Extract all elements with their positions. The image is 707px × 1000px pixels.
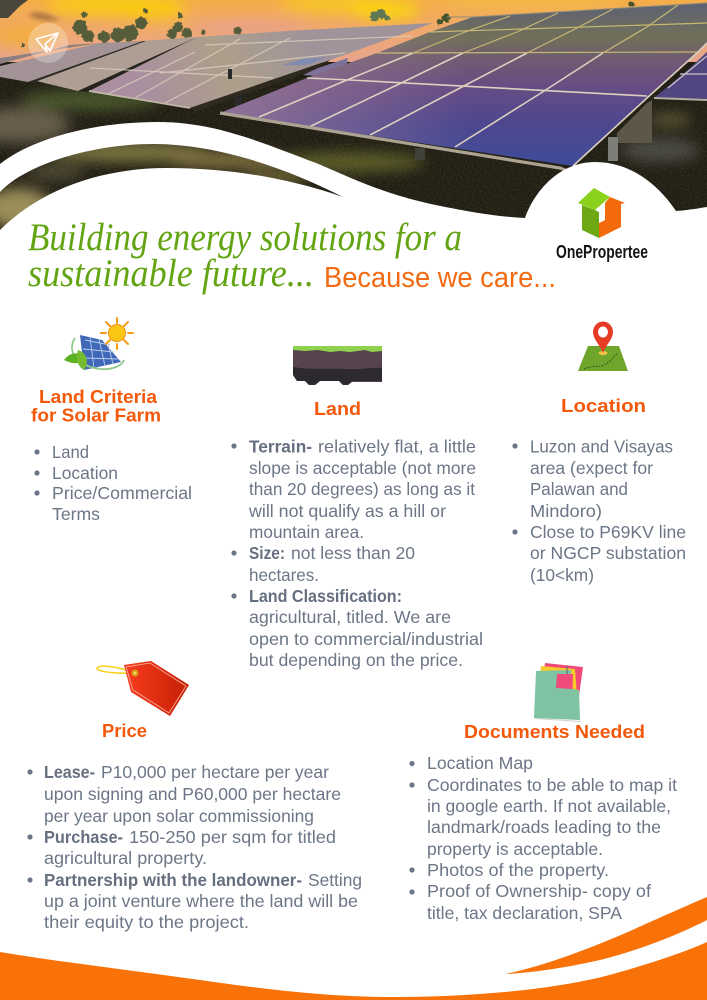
list: price: per year upon solar commissioning xyxy=(44,806,314,826)
list: land criteria: Land xyxy=(52,442,89,462)
heading: price: Price xyxy=(102,720,147,741)
list: price xyxy=(27,762,362,932)
list: land: open to commercial/industrial xyxy=(249,629,483,649)
icon: map pin on field xyxy=(578,322,628,371)
list: location: (10<km) xyxy=(530,565,594,585)
heading: land criteria: Land Criteria xyxy=(39,386,158,407)
icon: red price tag xyxy=(97,661,189,716)
heading: land: Land xyxy=(314,398,361,419)
list: land: hectares. xyxy=(249,565,319,585)
supports under big panel xyxy=(617,100,652,143)
heading: location: Location xyxy=(561,395,646,416)
heading: land criteria xyxy=(31,386,161,426)
list: price: Setting xyxy=(308,870,362,890)
title: Building energy solutions for a xyxy=(28,216,462,259)
list: price: P10,000 per hectare per year xyxy=(101,762,329,782)
title: sustainable future... xyxy=(28,252,314,295)
list: price: up a joint venture where the land will be xyxy=(44,891,358,911)
list: location: Palawan and xyxy=(530,479,628,499)
list: price: 150-250 per sqm for titled xyxy=(129,827,336,847)
ground xyxy=(0,90,700,228)
list: land: Land Classification: xyxy=(249,586,402,606)
logo: OnePropertee: OnePropertee xyxy=(556,242,648,262)
side panel on right xyxy=(654,52,707,100)
list: price: agricultural property. xyxy=(44,848,207,868)
list: price: Purchase- xyxy=(44,827,123,847)
list: documents needed: property is acceptable. xyxy=(427,839,603,859)
list: price: Lease- xyxy=(44,762,95,782)
list: land criteria: Location xyxy=(52,463,118,483)
list: documents needed: Coordinates to be able to map it xyxy=(427,775,677,795)
list: price: their equity to the project. xyxy=(44,912,249,932)
list: location xyxy=(512,436,686,585)
list: price: upon signing and P60,000 per hectare xyxy=(44,784,341,804)
small panel shadows and posts xyxy=(228,69,242,111)
list: documents needed: Location Map xyxy=(427,753,533,773)
list: land: Size: xyxy=(249,543,285,563)
list: land: but depending on the price. xyxy=(249,650,463,670)
title: Because we care... xyxy=(324,262,556,294)
icon: solar panel with sun and leaf xyxy=(64,318,133,370)
list: land: agricultural, titled. We are xyxy=(249,607,451,627)
icon: paper plane badge xyxy=(28,23,68,63)
list: documents needed: in google earth. If not available, xyxy=(427,796,671,816)
list: land: not less than 20 xyxy=(291,543,415,563)
list: documents needed: Photos of the property. xyxy=(427,860,609,880)
heading: land criteria: for Solar Farm xyxy=(31,404,161,426)
icon: soil block xyxy=(293,346,382,385)
list: documents needed: landmark/roads leading to the xyxy=(427,817,661,837)
list: documents needed xyxy=(409,753,677,923)
heading: documents needed: Documents Needed xyxy=(464,721,645,742)
list: location: or NGCP substation xyxy=(530,543,686,563)
list: documents needed: Proof of Ownership- copy of xyxy=(427,881,651,901)
list: land criteria xyxy=(34,442,192,524)
footer orange swoosh xyxy=(505,897,707,974)
list: land: will not qualify as a hill or xyxy=(248,501,446,521)
list: land xyxy=(231,436,483,670)
footer orange wave xyxy=(0,942,707,1000)
list: land criteria: Price/Commercial xyxy=(52,483,192,503)
list: location: area (expect for xyxy=(530,458,653,478)
list: documents needed: title, tax declaration, SPA xyxy=(427,903,622,923)
list: location: Close to P69KV line xyxy=(530,522,686,542)
white wave with logo bump xyxy=(0,122,707,300)
list: location: Luzon and Visayas xyxy=(530,436,673,456)
logo: OnePropertee xyxy=(556,188,648,262)
list: location: Mindoro) xyxy=(530,501,602,521)
far panels xyxy=(0,43,100,64)
list: land: than 20 degrees) as long as it xyxy=(249,479,475,499)
list: land: mountain area. xyxy=(249,522,364,542)
list: land: slope is acceptable (not more xyxy=(249,458,476,478)
title xyxy=(28,216,556,295)
icon: document folder xyxy=(534,663,583,722)
header photo: solar farm at sunset xyxy=(0,0,707,232)
list: land criteria: Terms xyxy=(52,504,100,524)
list: land: relatively flat, a little xyxy=(318,436,476,456)
list: land: Terrain- xyxy=(249,436,312,456)
big panel xyxy=(220,3,707,166)
list: price: Partnership with the landowner- xyxy=(44,870,302,890)
